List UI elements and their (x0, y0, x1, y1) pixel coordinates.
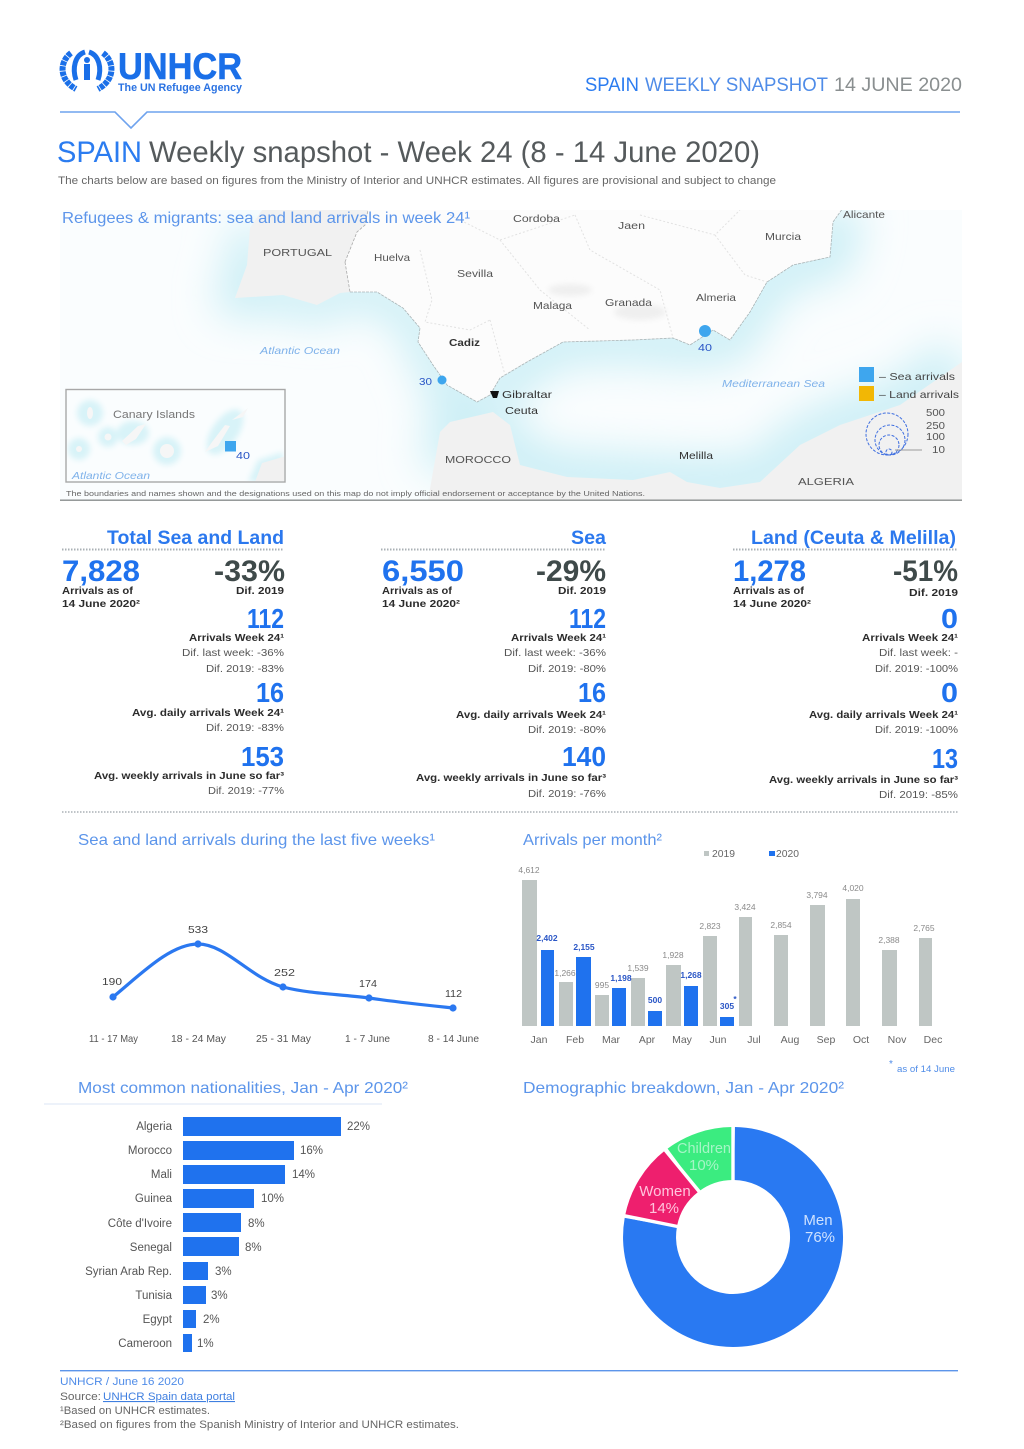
chart: line chart of arrivals in last five weeks: 112 (445, 988, 462, 1000)
footer: ²Based on figures from the Spanish Ministry of Interior and UNHCR estimates. (60, 1419, 459, 1431)
land: Morocco and Algeria (428, 362, 962, 500)
chart: arrivals per month bars (518, 832, 955, 1074)
chart: most common nationalities bars: Mali (151, 1169, 172, 1181)
land: Spain (345, 208, 843, 402)
panel: sea stats: Avg. daily arrivals Week 24¹ (456, 709, 607, 721)
panel: land stats: Dif. 2019 (909, 587, 958, 599)
title: SPAIN (57, 136, 142, 169)
chart: line chart of arrivals in last five weeks: 18 - 24 May (171, 1033, 227, 1045)
chart: demographic breakdown donut (523, 1080, 845, 1347)
map disclaimer: The boundaries and names shown and the designations used on this map do not imply official endorsement or acceptance by the United Nations. (66, 489, 645, 498)
panel: sea stats: Avg. weekly arrivals in June so far³ (416, 772, 607, 784)
footer: ¹Based on UNHCR estimates. (60, 1405, 210, 1417)
chart: most common nationalities bars: 16% (300, 1145, 323, 1157)
map legend: 500 (926, 407, 945, 419)
panel: total sea and land stats: Avg. daily arrivals Week 24¹ (132, 707, 285, 719)
panel: total sea and land stats: Arrivals Week 24¹ (189, 632, 285, 644)
chart: arrivals per month bars: Oct (853, 1034, 869, 1046)
chart: most common nationalities bars: Most common nationalities, Jan - Apr 2020² (78, 1080, 409, 1097)
header tag: Spain weekly snapshot date (585, 75, 962, 96)
panel: total sea and land stats: -33% (214, 555, 285, 588)
chart: arrivals per month bars: Jan (531, 1034, 548, 1046)
panel: sea stats: Dif. 2019: -80% (528, 663, 606, 675)
inset: Canary Islands: Atlantic Ocean (71, 470, 150, 482)
chart: most common nationalities bars: 3% (215, 1266, 232, 1278)
panel: arrivals map (60, 208, 962, 501)
panel: land stats: 14 June 2020² (733, 598, 812, 610)
chart: line chart of arrivals in last five weeks: 252 (274, 967, 295, 979)
chart legend (704, 848, 799, 860)
donut segment: men (623, 1127, 843, 1347)
logo: UNHCR (63, 46, 243, 94)
chart: arrivals per month bars: Feb (566, 1034, 584, 1046)
map legend: 10 (932, 444, 945, 456)
map place labels: Almeria (696, 292, 736, 304)
chart: line chart of arrivals in last five weeks: 1 - 7 June (345, 1033, 390, 1045)
map legend: – Land arrivals (879, 389, 959, 401)
chart: most common nationalities bars: 3% (211, 1290, 228, 1302)
chart: most common nationalities bars: Guinea (135, 1193, 173, 1205)
map place labels: MOROCCO (445, 454, 511, 466)
map legend: 100 (926, 431, 945, 443)
panel: total sea and land stats (62, 528, 285, 797)
chart: arrivals per month bars: Jul (747, 1034, 761, 1046)
panel: sea stats (381, 528, 607, 800)
panel: total sea and land stats: Avg. weekly arrivals in June so far³ (94, 770, 285, 782)
panel: sea stats: Arrivals as of (382, 585, 453, 597)
chart: arrivals per month bars: * (889, 1059, 893, 1070)
map place labels: Jaen (618, 220, 645, 232)
map place labels: Huelva (374, 252, 410, 264)
chart: most common nationalities bars: Morocco (128, 1145, 172, 1157)
land: Portugal (235, 210, 368, 305)
map place labels: PORTUGAL (263, 247, 332, 259)
map marker: Almeria sea arrivals 40: 40 (698, 342, 712, 354)
subtitle: The charts below are based on figures from the Ministry of Interior and UNHCR estimates. All figures are provisional and subject to change (58, 175, 776, 187)
inset: Canary Islands (66, 390, 286, 482)
chart: arrivals per month bars: Aug (781, 1034, 799, 1046)
chart: arrivals per month bars: 1,928 (662, 950, 684, 960)
panel: land stats: Avg. daily arrivals Week 24¹ (809, 709, 959, 721)
panel: land stats: 0 (941, 677, 958, 708)
panel: land stats: Land (Ceuta & Melilla) (751, 528, 956, 549)
chart: most common nationalities bars: 10% (261, 1193, 284, 1205)
panel: total sea and land stats: 7,828 (62, 555, 140, 588)
chart: arrivals per month bars: Mar (602, 1034, 621, 1046)
panel: sea stats: Arrivals Week 24¹ (511, 632, 607, 644)
chart: arrivals per month bars: 1,198 (610, 973, 632, 983)
panel: sea stats: Sea (571, 528, 606, 549)
chart: arrivals per month bars: Nov (888, 1034, 907, 1046)
map legend (859, 367, 959, 456)
chart: demographic breakdown donut: Demographic breakdown, Jan - Apr 2020² (523, 1080, 845, 1097)
inset: Canary Islands: Canary Islands (113, 409, 196, 421)
panel: land stats: Arrivals Week 24¹ (862, 632, 959, 644)
header tag: Spain weekly snapshot date: 14 JUNE 2020 (834, 75, 962, 96)
chart: arrivals per month bars: 1,268 (680, 970, 702, 980)
footer: UNHCR / June 16 2020 (60, 1376, 184, 1388)
chart: arrivals per month bars: 500 (648, 995, 662, 1005)
chart: most common nationalities bars: 2% (203, 1314, 220, 1326)
donut segment: children (668, 1127, 732, 1191)
footer: UNHCR Spain data portal (103, 1391, 235, 1403)
map legend: – Sea arrivals (879, 371, 955, 383)
panel: total sea and land stats: Arrivals as of (62, 585, 134, 597)
chart: most common nationalities bars: 22% (347, 1121, 370, 1133)
donut segment: women: Women (639, 1183, 691, 1200)
chart legend: 2019 (712, 848, 735, 860)
chart: arrivals per month bars: 3,794 (806, 890, 828, 900)
panel: sea stats: Dif. 2019: -76% (528, 788, 606, 800)
panel: land stats: Dif. 2019: -85% (879, 789, 958, 801)
map place labels: Ceuta (505, 405, 538, 417)
chart legend: 2020 (776, 848, 799, 860)
panel: land stats: Dif. 2019: -100% (875, 724, 958, 736)
map marker: Cadiz sea arrivals 30: 30 (419, 376, 432, 388)
chart: line chart of arrivals in last five weeks: 190 (102, 976, 122, 988)
panel: total sea and land stats: 112 (247, 603, 284, 634)
panel: sea stats: Dif. 2019: -80% (528, 724, 606, 736)
panel: sea stats: 112 (569, 603, 606, 634)
panel: sea stats: 16 (578, 677, 606, 708)
panel: land stats: Arrivals as of (733, 585, 805, 597)
panel: total sea and land stats: Total Sea and Land (107, 528, 284, 549)
donut segment: men: 76% (805, 1229, 835, 1246)
chart: arrivals per month bars: 2,388 (878, 935, 900, 945)
map place labels: Alicante (843, 209, 885, 221)
chart: arrivals per month bars: Arrivals per month² (523, 832, 663, 849)
footer: Source: (60, 1391, 101, 1403)
chart: most common nationalities bars: 8% (245, 1242, 262, 1254)
chart: line chart of arrivals in last five weeks (78, 832, 479, 1045)
chart: most common nationalities bars (44, 1080, 409, 1352)
panel: total sea and land stats: Dif. last week: -36% (182, 647, 284, 659)
panel: sea stats: Dif. last week: -36% (504, 647, 606, 659)
inset: Canary Islands: 40 (236, 450, 250, 462)
chart: most common nationalities bars: Senegal (130, 1242, 172, 1254)
chart: arrivals per month bars: 2,765 (913, 923, 935, 933)
chart: arrivals per month bars: 2,854 (770, 920, 792, 930)
title: Weekly snapshot - Week 24 (8 - 14 June 2020) (149, 136, 760, 169)
icon: Gibraltar marker (490, 391, 499, 398)
panel: land stats: 13 (932, 743, 958, 774)
map place labels: Cordoba (513, 213, 560, 225)
chart: arrivals per month bars: 2,402 (536, 933, 558, 943)
chart: line chart of arrivals in last five weeks: 8 - 14 June (428, 1033, 479, 1045)
map place labels: Sevilla (457, 268, 493, 280)
chart: most common nationalities bars: 1% (197, 1338, 214, 1350)
chart: line chart of arrivals in last five weeks: 533 (188, 924, 208, 936)
map place labels: Cadiz (449, 337, 480, 349)
panel: total sea and land stats: Dif. 2019 (236, 585, 284, 597)
header tag: Spain weekly snapshot date: WEEKLY SNAPSHOT (645, 75, 828, 96)
map place labels: Mediterranean Sea (722, 378, 825, 390)
map place labels: Granada (605, 297, 652, 309)
panel: land stats: Avg. weekly arrivals in June so far³ (769, 774, 959, 786)
map place labels: ALGERIA (798, 476, 854, 488)
panel: land stats: 0 (941, 603, 958, 634)
chart: most common nationalities bars: Algeria (136, 1121, 173, 1133)
map place labels (259, 209, 885, 488)
map heading: Refugees & migrants: sea and land arrivals in week 24¹ (62, 210, 470, 227)
chart: most common nationalities bars: 14% (292, 1169, 315, 1181)
sea glow (235, 208, 960, 482)
panel: land stats: Dif. last week: - (879, 647, 959, 659)
chart: most common nationalities bars: Egypt (143, 1314, 173, 1326)
chart: arrivals per month bars: 305 (720, 1001, 734, 1011)
panel: land stats: Dif. 2019: -100% (875, 663, 958, 675)
map place labels: Gibraltar (502, 389, 553, 401)
panel: sea stats: 140 (562, 741, 606, 772)
panel: sea stats: Dif. 2019 (558, 585, 606, 597)
chart: arrivals per month bars: Apr (639, 1034, 656, 1046)
chart: line chart of arrivals in last five weeks: 11 - 17 May (89, 1033, 139, 1045)
province borders (420, 210, 767, 375)
logo: UNHCR: UNHCR (118, 46, 242, 87)
map place labels: Melilla (679, 450, 713, 462)
donut segment: children: Children (677, 1140, 731, 1157)
chart: arrivals per month bars: as of 14 June (897, 1064, 955, 1074)
donut segment: women: 14% (649, 1200, 679, 1217)
panel: land stats (733, 528, 959, 801)
chart: most common nationalities bars: 8% (248, 1218, 265, 1230)
map place labels: Malaga (533, 300, 572, 312)
footer (60, 1370, 958, 1431)
panel: sea stats: 14 June 2020² (382, 598, 461, 610)
panel: total sea and land stats: Dif. 2019: -83% (206, 722, 284, 734)
map place labels: Murcia (765, 231, 801, 243)
panel: sea stats: 6,550 (382, 555, 464, 588)
coast line (350, 208, 843, 402)
icon: laurel with sheltering hands (63, 52, 111, 89)
chart: arrivals per month bars: 4,020 (842, 883, 864, 893)
chart: line chart of arrivals in last five weeks: 25 - 31 May (256, 1033, 312, 1045)
header rule with chevron (60, 112, 960, 128)
chart: arrivals per month bars: Jun (710, 1034, 727, 1046)
panel: total sea and land stats: Dif. 2019: -83% (206, 663, 284, 675)
chart: arrivals per month bars: 3,424 (734, 902, 756, 912)
panel: total sea and land stats: 16 (256, 677, 284, 708)
donut segment: women (625, 1150, 698, 1226)
panel: land stats: -51% (893, 555, 958, 588)
chart: arrivals per month bars: 2,823 (699, 921, 721, 931)
chart: line chart of arrivals in last five weeks: 174 (359, 978, 377, 990)
panel: total sea and land stats: 14 June 2020² (62, 598, 141, 610)
panel: total sea and land stats: 153 (241, 741, 284, 772)
chart: line chart of arrivals in last five weeks: Sea and land arrivals during the last five weeks¹ (78, 832, 435, 849)
chart: arrivals per month bars: 995 (595, 980, 609, 990)
chart: arrivals per month bars: 2,155 (573, 942, 595, 952)
logo: UNHCR: The UN Refugee Agency (118, 82, 243, 94)
map marker: Cadiz sea arrivals 30 (419, 376, 446, 388)
chart: most common nationalities bars: Syrian Arab Rep. (85, 1266, 172, 1278)
chart: arrivals per month bars: Sep (817, 1034, 835, 1046)
chart: arrivals per month bars: * (733, 994, 737, 1004)
map legend: 250 (926, 420, 945, 432)
chart: arrivals per month bars: 4,612 (518, 865, 540, 875)
chart: arrivals per month bars: 1,539 (627, 963, 649, 973)
chart: arrivals per month bars: Dec (924, 1034, 942, 1046)
chart: most common nationalities bars: Tunisia (135, 1290, 173, 1302)
chart: arrivals per month bars: May (672, 1034, 693, 1046)
donut segment: children: 10% (689, 1157, 719, 1174)
map marker: Almeria sea arrivals 40 (698, 325, 712, 354)
panel: sea stats: -29% (536, 555, 606, 588)
map place labels: Atlantic Ocean (259, 345, 340, 357)
chart: most common nationalities bars: Cameroon (118, 1338, 172, 1350)
panel: land stats: 1,278 (733, 555, 806, 588)
chart: arrivals per month bars: 1,266 (554, 968, 576, 978)
chart: most common nationalities bars: Côte d'Ivoire (108, 1218, 172, 1230)
donut segment: men: Men (803, 1212, 833, 1229)
panel: total sea and land stats: Dif. 2019: -77% (208, 785, 284, 797)
header tag: Spain weekly snapshot date: SPAIN (585, 75, 639, 96)
